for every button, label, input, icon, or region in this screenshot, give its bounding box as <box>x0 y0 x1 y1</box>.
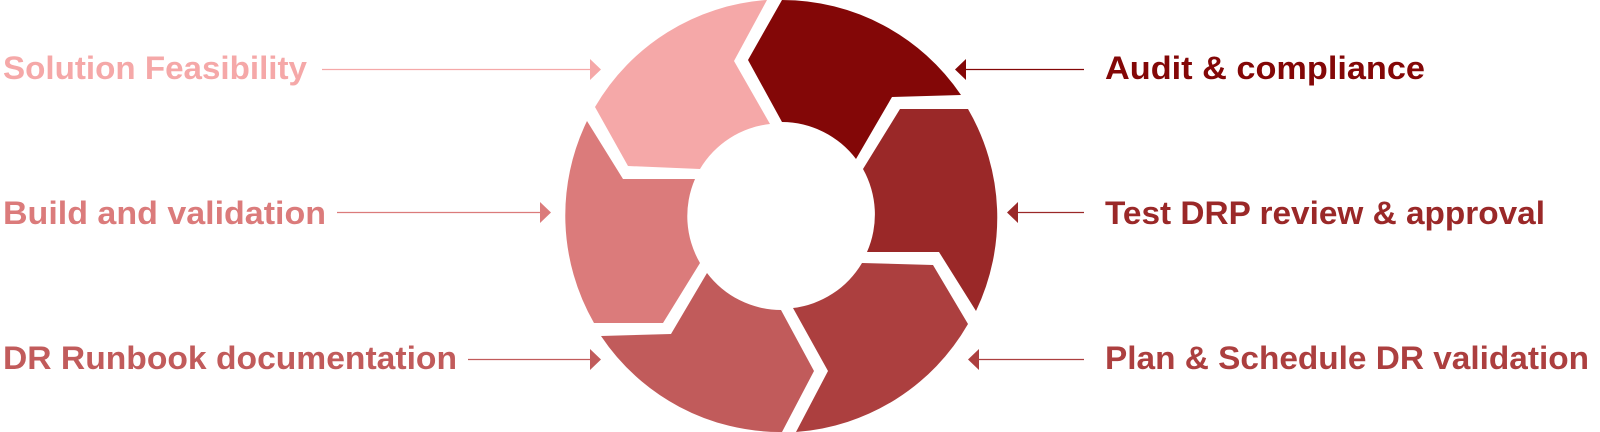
segment: Audit & compliance <box>748 0 961 159</box>
label: Build and validation <box>3 195 326 231</box>
segment: Build and validation <box>565 121 700 323</box>
arrow <box>955 59 1084 80</box>
label group: Solution Feasibility <box>3 50 601 86</box>
arrow <box>468 349 601 370</box>
segment: DR Runbook documentation <box>601 273 814 432</box>
label: Test DRP review & approval <box>1105 195 1545 231</box>
label: Plan & Schedule DR validation <box>1105 340 1589 376</box>
arrow <box>968 349 1084 370</box>
arrow <box>322 59 601 80</box>
label group: Test DRP review & approval <box>1007 195 1545 231</box>
label: DR Runbook documentation <box>3 340 457 376</box>
segment: Test DRP review & approval <box>863 109 997 311</box>
arrow <box>337 202 551 223</box>
label group: Build and validation <box>3 195 551 231</box>
label: Audit & compliance <box>1105 50 1425 86</box>
label group: DR Runbook documentation <box>3 340 601 376</box>
segment: Solution Feasibility <box>595 0 770 169</box>
label group: Audit & compliance <box>955 50 1425 86</box>
cycle diagram <box>565 0 997 432</box>
arrow <box>1007 202 1084 223</box>
label group: Plan & Schedule DR validation <box>968 340 1589 376</box>
segment: Plan & Schedule DR validation <box>793 263 968 432</box>
label: Solution Feasibility <box>3 50 307 86</box>
